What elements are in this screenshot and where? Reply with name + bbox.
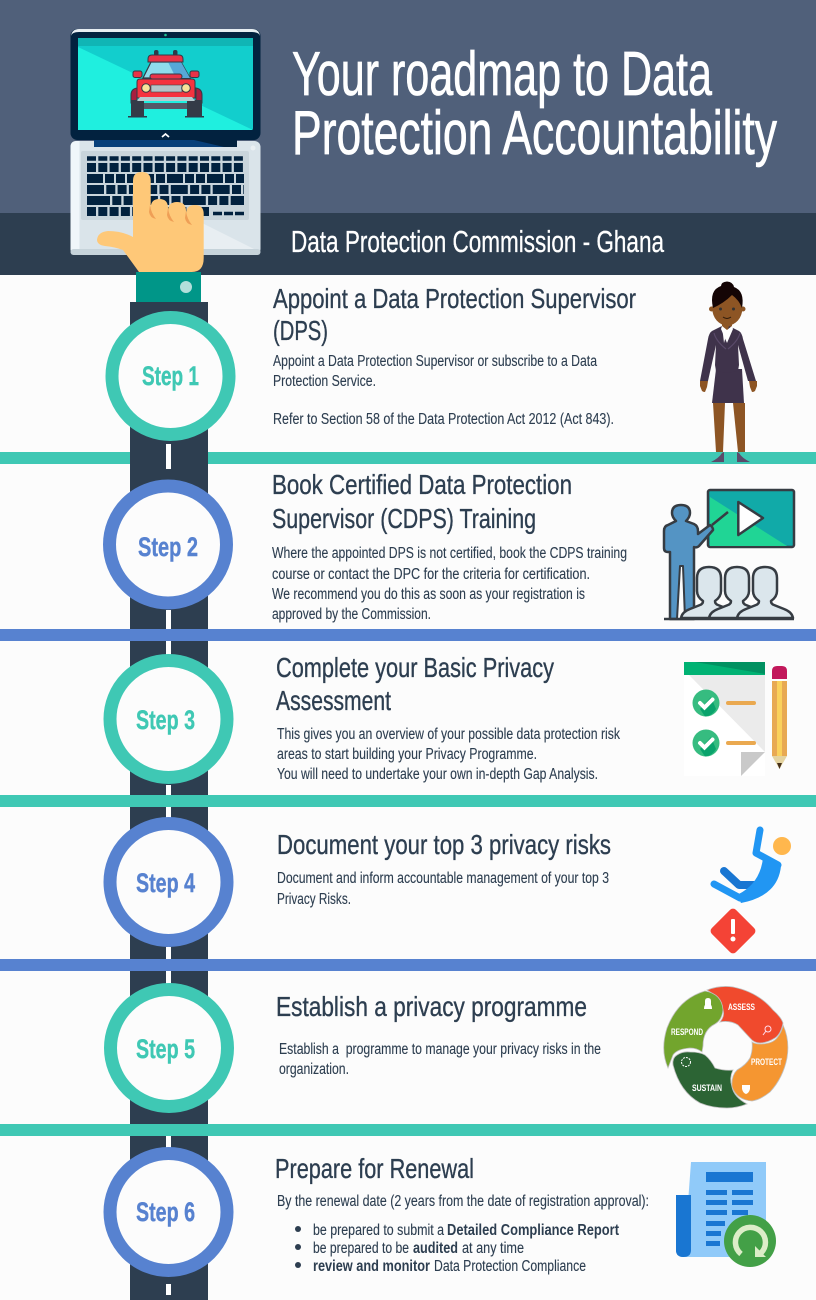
- step 2 heading: Book Certified Data Protection: [272, 469, 572, 500]
- step 3 circle: [110, 660, 227, 778]
- step 6 bullet list: Detailed Compliance Report: [447, 1222, 619, 1239]
- road: [130, 302, 208, 1300]
- step 1 text: Refer to Section 58 of the Data Protection Act 2012 (Act 843).: [273, 411, 614, 428]
- step 6 bullet list: be prepared to submit a: [313, 1222, 444, 1239]
- step 2 heading: Supervisor (CDPS) Training: [272, 503, 536, 534]
- step 6 bullet list: Data Protection Compliance: [434, 1258, 586, 1275]
- step 2 text: approved by the Commission.: [272, 606, 431, 623]
- step 6 circle: [110, 1154, 227, 1270]
- step 3 text: You will need to undertake your own in-depth Gap Analysis.: [277, 766, 598, 783]
- step 6 bullet list: at any time: [462, 1240, 524, 1257]
- icon: privacy programme cycle: SUSTAIN: [692, 1083, 722, 1093]
- icon: businesswoman: [700, 282, 757, 462]
- icon: falling person and warning: [709, 830, 791, 955]
- step 3 heading: Complete your Basic Privacy: [276, 652, 554, 683]
- subtitle: Data Protection Commission - Ghana: [291, 224, 665, 259]
- icon: report with renewal badge: [676, 1162, 776, 1267]
- icon: privacy programme cycle: [664, 986, 788, 1108]
- step 3 text: [277, 726, 620, 783]
- icon: red jeep: [128, 50, 204, 118]
- step 6 bullet list: be prepared to be: [313, 1240, 409, 1257]
- step 5 circle: Step 5: [136, 1034, 195, 1064]
- step 2 text: We recommend you do this as soon as your registration is: [272, 586, 585, 603]
- icon: checklist and pencil: [684, 662, 787, 776]
- section bars: [0, 452, 816, 1136]
- step 2 text: Where the appointed DPS is not certified, book the CDPS training: [272, 545, 627, 562]
- step 4 circle: [110, 824, 227, 940]
- step 3 circle: Step 3: [136, 705, 195, 735]
- step 2 text: [272, 545, 627, 623]
- step 6 bullet list: [295, 1222, 619, 1275]
- step 1 text: Protection Service.: [273, 373, 376, 390]
- step 6 heading: Prepare for Renewal: [275, 1153, 474, 1184]
- step 5 circle: [110, 990, 228, 1106]
- step 1 text: Appoint a Data Protection Supervisor or subscribe to a Data: [273, 353, 597, 370]
- step 1 text: [273, 353, 614, 428]
- step 6 text: By the renewal date (2 years from the date of registration approval):: [277, 1193, 649, 1210]
- icon: presenter and audience: [664, 490, 794, 619]
- step 3 heading: Assessment: [276, 685, 391, 716]
- step 2 circle: Step 2: [138, 532, 198, 562]
- step 4 text: [277, 870, 609, 908]
- step 4 circle: Step 4: [136, 868, 195, 898]
- header banner: [0, 0, 816, 275]
- step 2 heading: [272, 469, 572, 534]
- step 4 text: Privacy Risks.: [277, 891, 351, 908]
- step 2 circle: [110, 486, 226, 603]
- step 2 text: course or contact the DPC for the criteria for certification.: [272, 566, 590, 583]
- step 1 heading: Appoint a Data Protection Supervisor: [273, 283, 636, 314]
- step 5 heading: Establish a privacy programme: [276, 991, 587, 1022]
- icon: privacy programme cycle: PROTECT: [751, 1057, 782, 1067]
- icon: privacy programme cycle: ASSESS: [728, 1002, 755, 1012]
- step 1 heading: [273, 283, 636, 346]
- step 4 heading: Document your top 3 privacy risks: [277, 829, 611, 860]
- step 5 text: [279, 1041, 601, 1078]
- step 6 circle: Step 6: [136, 1197, 195, 1227]
- icon: privacy programme cycle: RESPOND: [671, 1027, 703, 1037]
- icon: laptop with hand: [70, 29, 260, 302]
- icon: pointing hand: [97, 172, 204, 272]
- step 3 text: This gives you an overview of your possible data protection risk: [277, 726, 620, 743]
- step 4 text: Document and inform accountable management of your top 3: [277, 870, 609, 887]
- step 1 circle: Step 1: [142, 361, 199, 391]
- icon: shirt cuff: [136, 272, 201, 302]
- step 1 heading: (DPS): [273, 315, 328, 346]
- step 5 text: organization.: [279, 1061, 349, 1078]
- step 3 text: areas to start building your Privacy Programme.: [277, 746, 537, 763]
- step 6 bullet list: review and monitor: [313, 1258, 430, 1275]
- step 1 circle: [112, 318, 229, 434]
- title: [292, 40, 777, 168]
- step 5 text: Establish a programme to manage your privacy risks in the: [279, 1041, 601, 1058]
- step 3 heading: [276, 652, 554, 716]
- step 6 bullet list: audited: [413, 1240, 458, 1257]
